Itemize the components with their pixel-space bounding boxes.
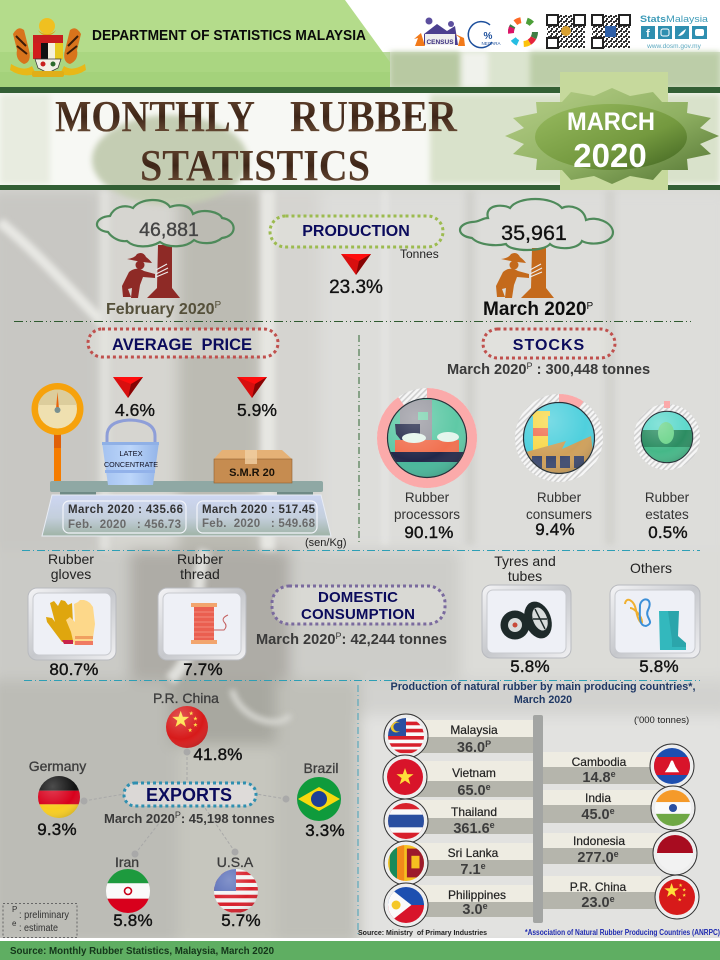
- logo: StatsMalaysia social links: f: [646, 28, 650, 40]
- cloud: February production: [97, 200, 234, 246]
- row: Vietnam: Vietnam: [452, 766, 496, 780]
- label: February 2020: February 2020: [106, 301, 215, 318]
- arrow and value: SMR: 5.9%: [237, 400, 277, 420]
- main title: MONTHLY: [55, 92, 255, 141]
- flag: Germany: [29, 758, 86, 839]
- label: stocks total: : 300,448 tonnes: [533, 362, 650, 378]
- center bar: [533, 715, 543, 923]
- chart title: Production of natural rubber by main producing countries*,: [390, 681, 696, 693]
- label: stocks total: March 2020: [447, 362, 527, 378]
- row: Philippines: 3.0: [462, 902, 483, 918]
- flag: Germany: Germany: [29, 758, 86, 774]
- QR code one: [547, 15, 585, 48]
- row: India: India: [585, 791, 611, 805]
- arrow and value: latex: 4.6%: [115, 400, 155, 420]
- flag: Iran: Iran: [115, 854, 139, 870]
- pill: domestic consumption heading: [272, 586, 445, 624]
- label: stocks total: P: [527, 361, 533, 371]
- label: rubber processors share: Rubber: [405, 490, 450, 505]
- flag: USA: U.S.A: [217, 854, 254, 870]
- label: rubber estates share: Rubber: [645, 490, 690, 505]
- pill: stocks heading: [483, 329, 615, 358]
- label: consumption total: P: [336, 631, 342, 641]
- pill: average price heading: [88, 329, 278, 357]
- label: rubber estates share: estates: [645, 507, 689, 522]
- icon: down arrow: [341, 254, 371, 275]
- legend: preliminary and estimate: [3, 904, 77, 938]
- label: rubber estates share: [645, 490, 690, 542]
- row: China: 23.0: [581, 895, 610, 911]
- pill: stocks heading: STOCKS: [513, 337, 585, 354]
- logo: Hari Statistik Negara: [468, 22, 501, 48]
- row: Thailand: e: [490, 820, 495, 830]
- row: Cambodia: Cambodia: [572, 755, 627, 769]
- icon: SMR 20 box: [214, 450, 292, 483]
- card: rubber thread: 7.7%: [183, 660, 223, 679]
- donut: rubber consumers: [520, 398, 600, 480]
- card: rubber gloves: gloves: [51, 566, 91, 582]
- label: rubber consumers share: 9.4%: [535, 520, 575, 539]
- price box: latex concentrate: March 2020 : 435.66: [68, 504, 183, 516]
- row: Philippines: [384, 883, 533, 927]
- row: Indonesia: e: [614, 849, 619, 859]
- cloud: March production: [460, 199, 613, 250]
- icon: latex bucket: [102, 420, 159, 485]
- label: rubber processors share: 90.1%: [404, 523, 454, 542]
- flag: China: 41.8%: [193, 745, 243, 764]
- title band background: [0, 87, 720, 205]
- legend: preliminary and estimate: : preliminary: [19, 910, 69, 921]
- row: Indonesia: [543, 831, 697, 875]
- flag: USA: [214, 854, 261, 930]
- label: rubber estates share: 0.5%: [648, 523, 688, 542]
- footer source bar: [0, 938, 720, 960]
- card: rubber thread: Rubber: [177, 551, 223, 567]
- label: exports total: P: [175, 810, 181, 820]
- pill: production heading: PRODUCTION: [302, 223, 410, 240]
- flag: Brazil: [297, 760, 345, 840]
- price box: SMR 20: [197, 501, 317, 533]
- row: Sri Lanka: [384, 841, 533, 885]
- pill: average price heading: AVERAGE PRICE: [112, 336, 252, 354]
- label: rubber consumers share: [526, 490, 592, 539]
- panel: stocks: [382, 329, 696, 542]
- logo: Hari Statistik Negara: %: [484, 31, 493, 42]
- value: production change: 23.3%: [329, 277, 383, 298]
- header band: [0, 0, 720, 88]
- QR code two: [592, 15, 630, 48]
- row: China: e: [610, 894, 615, 904]
- icon: latex bucket: CONCENTRATE: [104, 460, 158, 469]
- row: Vietnam: [383, 755, 533, 799]
- flag: China: P.R. China: [153, 690, 219, 706]
- price box: SMR 20: Feb. 2020 : 549.68: [202, 518, 316, 530]
- card: others: [610, 560, 700, 676]
- legend: preliminary and estimate: e: [12, 919, 17, 928]
- crest: Malaysian coat of arms: [10, 18, 86, 77]
- footer source bar: Source: Monthly Rubber Statistics, Malaysia, March 2020: [10, 945, 274, 957]
- arrow and value: latex: [113, 377, 155, 420]
- logo: census: [414, 18, 465, 46]
- card: others: Others: [630, 560, 672, 576]
- label: rubber processors share: processors: [394, 507, 460, 522]
- row: India: 45.0: [581, 807, 610, 823]
- flag: Iran: 5.8%: [113, 911, 153, 930]
- row: Thailand: [384, 799, 533, 843]
- label: unit: ('000 tonnes): [634, 715, 689, 726]
- icon: rubber tapper February: [122, 245, 180, 298]
- panel: average price: [32, 329, 347, 549]
- row: Cambodia: e: [611, 769, 616, 779]
- cloud: March production: 35,961: [501, 221, 567, 245]
- row: Sri Lanka: 7.1: [460, 862, 481, 878]
- icon: scale gauge: [32, 383, 84, 482]
- cloud: February production: 46,881: [139, 219, 199, 241]
- card: rubber gloves: Rubber: [48, 551, 94, 567]
- row: Indonesia: 277.0: [577, 850, 614, 866]
- pill: domestic consumption heading: DOMESTIC: [318, 589, 398, 606]
- card: rubber thread: [158, 551, 246, 679]
- row: Sri Lanka: Sri Lanka: [448, 846, 499, 860]
- label: tonnes unit: Tonnes: [400, 247, 439, 261]
- chart title: [390, 681, 696, 706]
- card: tyres and tubes: [482, 553, 571, 676]
- date badge: [505, 72, 719, 190]
- icon: SMR 20 box: S.M.R 20: [229, 467, 275, 479]
- pill: exports heading: EXPORTS: [146, 785, 232, 805]
- icon: latex bucket: LATEX: [119, 449, 143, 458]
- main title: [55, 92, 458, 190]
- logo: SDG wheel: [511, 20, 535, 44]
- row: Malaysia: 36.0: [457, 740, 485, 756]
- donut: rubber estates: [638, 401, 696, 466]
- flag: Brazil: Brazil: [303, 760, 339, 776]
- row: Philippines: Philippines: [448, 888, 506, 902]
- panel: domestic consumption: [28, 551, 700, 679]
- logo: Hari Statistik Negara: NEGARA: [481, 41, 501, 46]
- source note: Source: Ministry of Primary Industries: [358, 928, 487, 937]
- logo: StatsMalaysia social links: Stats Malaysia: [640, 14, 709, 25]
- row: India: [543, 786, 695, 830]
- price box: latex concentrate: [63, 501, 186, 533]
- card: rubber gloves: 80.7%: [49, 660, 99, 679]
- row: Thailand: 361.6: [453, 821, 490, 837]
- card: tyres and tubes: Tyres and: [494, 553, 556, 569]
- label: consumption total: March 2020: [256, 632, 336, 648]
- row: Indonesia: Indonesia: [573, 834, 625, 848]
- card: rubber thread: thread: [180, 566, 220, 582]
- label: unit: (sen/Kg): [305, 537, 347, 549]
- label: February 2020: P: [215, 300, 222, 311]
- icon: scale platform: [42, 481, 331, 536]
- row: China: [543, 875, 699, 919]
- row: Vietnam: 65.0: [457, 783, 486, 799]
- pill: exports heading: [124, 783, 256, 806]
- card: tyres and tubes: 5.8%: [510, 657, 550, 676]
- label: March 2020: P: [587, 301, 594, 312]
- donut: rubber processors: [382, 393, 472, 483]
- main title: RUBBER: [290, 92, 458, 141]
- card: others: 5.8%: [639, 657, 679, 676]
- row: Philippines: e: [483, 901, 488, 911]
- icon: rubber tapper March: [496, 248, 554, 298]
- row: Sri Lanka: e: [481, 861, 486, 871]
- price box: SMR 20: March 2020 : 517.45: [202, 504, 316, 516]
- row: Malaysia: P: [485, 739, 491, 749]
- row: India: e: [610, 806, 615, 816]
- label: rubber processors share: [394, 490, 460, 542]
- label: exports total: March 2020: [104, 811, 175, 826]
- price box: latex concentrate: Feb. 2020 : 456.73: [68, 519, 181, 531]
- date badge: 2020: [573, 137, 647, 174]
- row: Vietnam: e: [486, 782, 491, 792]
- main title: STATISTICS: [140, 141, 370, 190]
- flag: Brazil: 3.3%: [305, 821, 345, 840]
- flag: Iran: [106, 854, 153, 930]
- chart title: March 2020: [514, 694, 572, 706]
- logo: StatsMalaysia social links: [640, 14, 709, 50]
- panel: production by country: [358, 681, 720, 937]
- label: exports total: : 45,198 tonnes: [181, 811, 275, 826]
- arrow and value: SMR: [237, 377, 277, 420]
- label: consumption total: : 42,244 tonnes: [342, 632, 447, 648]
- logo: census: CENSUS: [426, 39, 454, 46]
- row: Cambodia: 14.8: [582, 770, 611, 786]
- row: Cambodia: [543, 744, 694, 788]
- panel: exports: [3, 690, 345, 938]
- row: Malaysia: [384, 714, 533, 758]
- row: Malaysia: Malaysia: [450, 723, 498, 737]
- label: March 2020: March 2020: [483, 299, 587, 320]
- card: rubber gloves: [28, 551, 116, 679]
- pill: production heading: [270, 216, 443, 247]
- heading: department name: DEPARTMENT OF STATISTICS MALAYSIA: [92, 27, 366, 44]
- panel: production: [97, 199, 613, 320]
- legend: preliminary and estimate: P: [12, 905, 17, 914]
- logo: StatsMalaysia social links: www.dosm.gov.my: [646, 43, 702, 50]
- flag: China: [153, 690, 243, 764]
- flag: Germany: 9.3%: [37, 820, 77, 839]
- card: tyres and tubes: tubes: [508, 568, 542, 584]
- date badge: MARCH: [567, 108, 655, 136]
- row: China: P.R. China: [570, 880, 627, 894]
- flag: USA: 5.7%: [221, 911, 261, 930]
- row: Thailand: Thailand: [451, 805, 497, 819]
- label: rubber consumers share: consumers: [526, 507, 592, 522]
- pill: domestic consumption heading: CONSUMPTION: [301, 606, 415, 623]
- label: rubber consumers share: Rubber: [537, 490, 582, 505]
- legend: preliminary and estimate: : estimate: [19, 923, 58, 934]
